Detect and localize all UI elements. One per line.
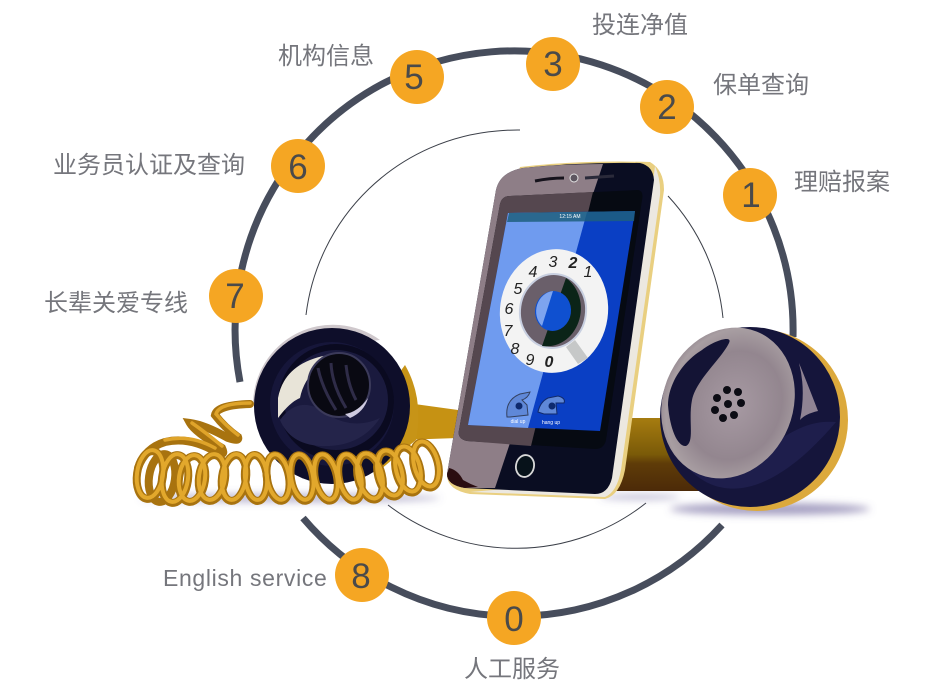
mauve reflection <box>447 164 603 488</box>
rotary dial: 5 <box>514 281 523 298</box>
item 2: 保单查询 <box>713 72 809 99</box>
item 5: 5 <box>404 58 424 97</box>
dial up icon: dial up <box>511 419 526 425</box>
dial up icon <box>507 392 530 425</box>
item 0: 人工服务 <box>464 656 560 683</box>
item 5: 机构信息 <box>278 43 374 70</box>
item 7: 7 <box>225 277 245 316</box>
rotary dial: 9 <box>526 352 535 369</box>
left handset: earpiece sphere <box>253 325 418 484</box>
item 3 <box>526 12 688 91</box>
item 8: English service <box>163 565 327 591</box>
hang up icon: hang up <box>542 420 560 426</box>
item 3: 投连净值 <box>592 12 688 39</box>
coiled cord <box>134 403 443 505</box>
item 2 <box>640 72 809 134</box>
rotary dial: 2 <box>568 255 578 272</box>
right handset: speaker sphere <box>639 307 848 511</box>
item 6: 6 <box>288 148 308 187</box>
rotary dial: 3 <box>549 254 558 271</box>
rotary dial: 0 <box>545 354 554 371</box>
item 3: 3 <box>543 45 563 84</box>
phone edge <box>447 162 664 499</box>
item 7 <box>44 269 263 323</box>
item 6 <box>53 139 325 193</box>
rotary dial: 1 <box>584 264 592 281</box>
rotary dial: 4 <box>529 264 538 281</box>
speaker holes <box>711 386 745 422</box>
item 8: 8 <box>351 557 371 596</box>
item 7: 长辈关爱专线 <box>44 290 188 317</box>
phone body <box>447 163 654 494</box>
corner reflection <box>447 468 478 488</box>
item 6: 业务员认证及查询 <box>53 152 245 179</box>
outer ring arcs <box>235 51 793 616</box>
item 2: 2 <box>657 88 677 127</box>
status bar <box>507 211 635 222</box>
earpiece <box>535 174 614 182</box>
item 0 <box>464 591 560 683</box>
home button <box>514 453 536 479</box>
rotary dial: 8 <box>511 341 520 358</box>
inner thin circle arcs <box>306 130 723 548</box>
item 1 <box>723 168 890 222</box>
hang up icon <box>538 396 564 426</box>
smartphone <box>447 162 664 499</box>
item 1: 理赔报案 <box>794 169 890 196</box>
rotary dial: 7 <box>504 323 514 340</box>
screen <box>468 211 635 431</box>
ground shadows <box>140 494 870 515</box>
bezel <box>459 190 642 449</box>
rotary dial <box>492 242 616 380</box>
item 5 <box>278 43 444 104</box>
item 1: 1 <box>741 176 761 215</box>
status time: 12:15 AM <box>559 214 581 220</box>
gold stem behind phone <box>400 402 700 491</box>
rotary dial: 6 <box>505 301 514 318</box>
reflection on handset <box>799 363 818 420</box>
grip recess <box>668 339 730 446</box>
item 0: 0 <box>504 600 524 639</box>
item 8 <box>163 548 389 602</box>
